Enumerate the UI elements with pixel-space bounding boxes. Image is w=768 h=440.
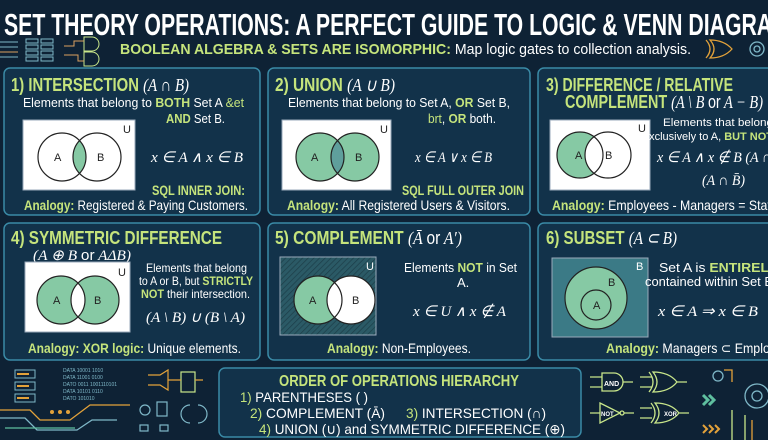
icon: logic gates right bottom: XOR [664,412,678,418]
venn diagram [280,257,376,335]
icon: logic gates right bottom: AND [604,381,619,388]
venn diagram [282,120,391,190]
formula: (A \ B) ∪ (B \ A) [146,310,245,326]
formula: x ∈ A ∨ x ∈ B [414,150,492,166]
icon: plug and gear [140,370,207,431]
venn diagram: U [366,261,374,273]
venn diagram [550,120,650,190]
venn diagram: B [605,150,612,162]
venn diagram: U [380,124,388,136]
heading: 5) COMPLEMENT (Ā or A′) [275,228,462,249]
venn diagram: A [593,300,601,312]
panel: order of operations: 1) PARENTHESES ( ) [240,389,368,405]
panel: intersection: AND Set B. [166,111,225,126]
venn diagram: A [309,295,317,307]
panel: difference [538,68,768,215]
heading: 2) UNION (A ∪ B) [275,75,395,96]
icon: data rows left bottom: DATA 10001 1010 [63,368,103,374]
icon: logic gates right bottom: NOT [601,412,614,418]
sql label: SQL INNER JOIN: [152,182,245,198]
icon: data rows left bottom: DATO 0011 1001110101 [63,382,117,388]
icon: xor gate and gear [706,40,764,58]
icon: left header gates [0,37,99,66]
venn diagram [25,262,130,332]
heading: 1) INTERSECTION (A ∩ B) [11,75,189,96]
heading: 6) SUBSET (A ⊂ B) [546,228,677,249]
description: Elements that belong [663,117,768,129]
venn diagram: B [352,295,359,307]
icon: logic gates right bottom [590,372,689,423]
venn diagram: A [54,152,62,164]
panel: difference: COMPLEMENT (A \ B or A − B) [565,92,763,113]
venn diagram: B [608,277,615,289]
venn diagram: U [638,123,646,135]
panel: order of operations [219,368,581,437]
panel: complement: A. [457,275,469,290]
panel: difference: (A ∩ B̄) [702,173,745,189]
panel: complement [268,223,530,360]
analogy: Analogy: Registered & Paying Customers. [24,197,248,213]
venn diagram [23,120,135,190]
description: Elements that belong to BOTH Set A &et [23,95,244,110]
panel: union: brt, OR both. [428,111,496,126]
analogy: Analogy: Non-Employees. [327,340,471,356]
panel: union [268,68,530,215]
panel: symmetric difference: to A or B, but STRICTLY [139,274,253,288]
panel: intersection [4,68,260,215]
venn diagram: B [97,152,104,164]
icon: data rows left bottom [0,368,130,430]
subtitle: BOOLEAN ALGEBRA & SETS ARE ISOMORPHIC: Map logic gates to collection analysis. [120,41,691,58]
venn diagram: A [53,295,61,307]
venn diagram: U [118,267,126,279]
analogy: Analogy: XOR logic: Unique elements. [28,340,241,356]
panel: symmetric difference [4,223,260,360]
venn diagram [552,258,648,337]
formula: x ∈ A ∧ x ∈ B [150,150,243,166]
description: Elements that belong [146,261,247,275]
panel: order of operations: 4) UNION (∪) and SYMMETRIC DIFFERENCE (⊕) [259,421,565,437]
panel: subset [538,223,768,360]
venn diagram: B [355,152,362,164]
venn diagram: B [636,261,643,273]
panel: order of operations: 2) COMPLEMENT (Ā) [250,405,385,421]
icon: data rows left bottom: DATA 11001 0100 [63,375,103,381]
icon: data rows left bottom: DATA 10101 0110 [63,389,103,395]
formula: x ∈ A ⇒ x ∈ B [657,304,758,320]
panel: symmetric difference: (A ⊕ B or AΔB) [33,247,131,264]
panel: order of operations: 3) INTERSECTION (∩) [406,405,546,421]
venn diagram: U [123,124,131,136]
formula: x ∈ U ∧ x ∉ A [412,303,507,320]
venn diagram: A [311,152,319,164]
heading: 4) SYMMETRIC DIFFERENCE [11,228,222,248]
venn diagram: B [94,295,101,307]
panel: symmetric difference: NOT their intersection. [141,287,250,301]
description: Elements that belong to Set A, OR Set B, [288,95,510,110]
panel: order of operations: ORDER OF OPERATIONS HIERARCHY [279,373,519,390]
description: Elements NOT in Set [404,260,517,275]
icon: gears and arrows right [703,370,768,440]
venn diagram: A [575,150,583,162]
sql label: SQL FULL OUTER JOIN [402,182,524,198]
analogy: Analogy: All Registered Users & Visitors. [287,197,510,213]
icon: data rows left bottom: DATO 101010 [63,396,95,402]
